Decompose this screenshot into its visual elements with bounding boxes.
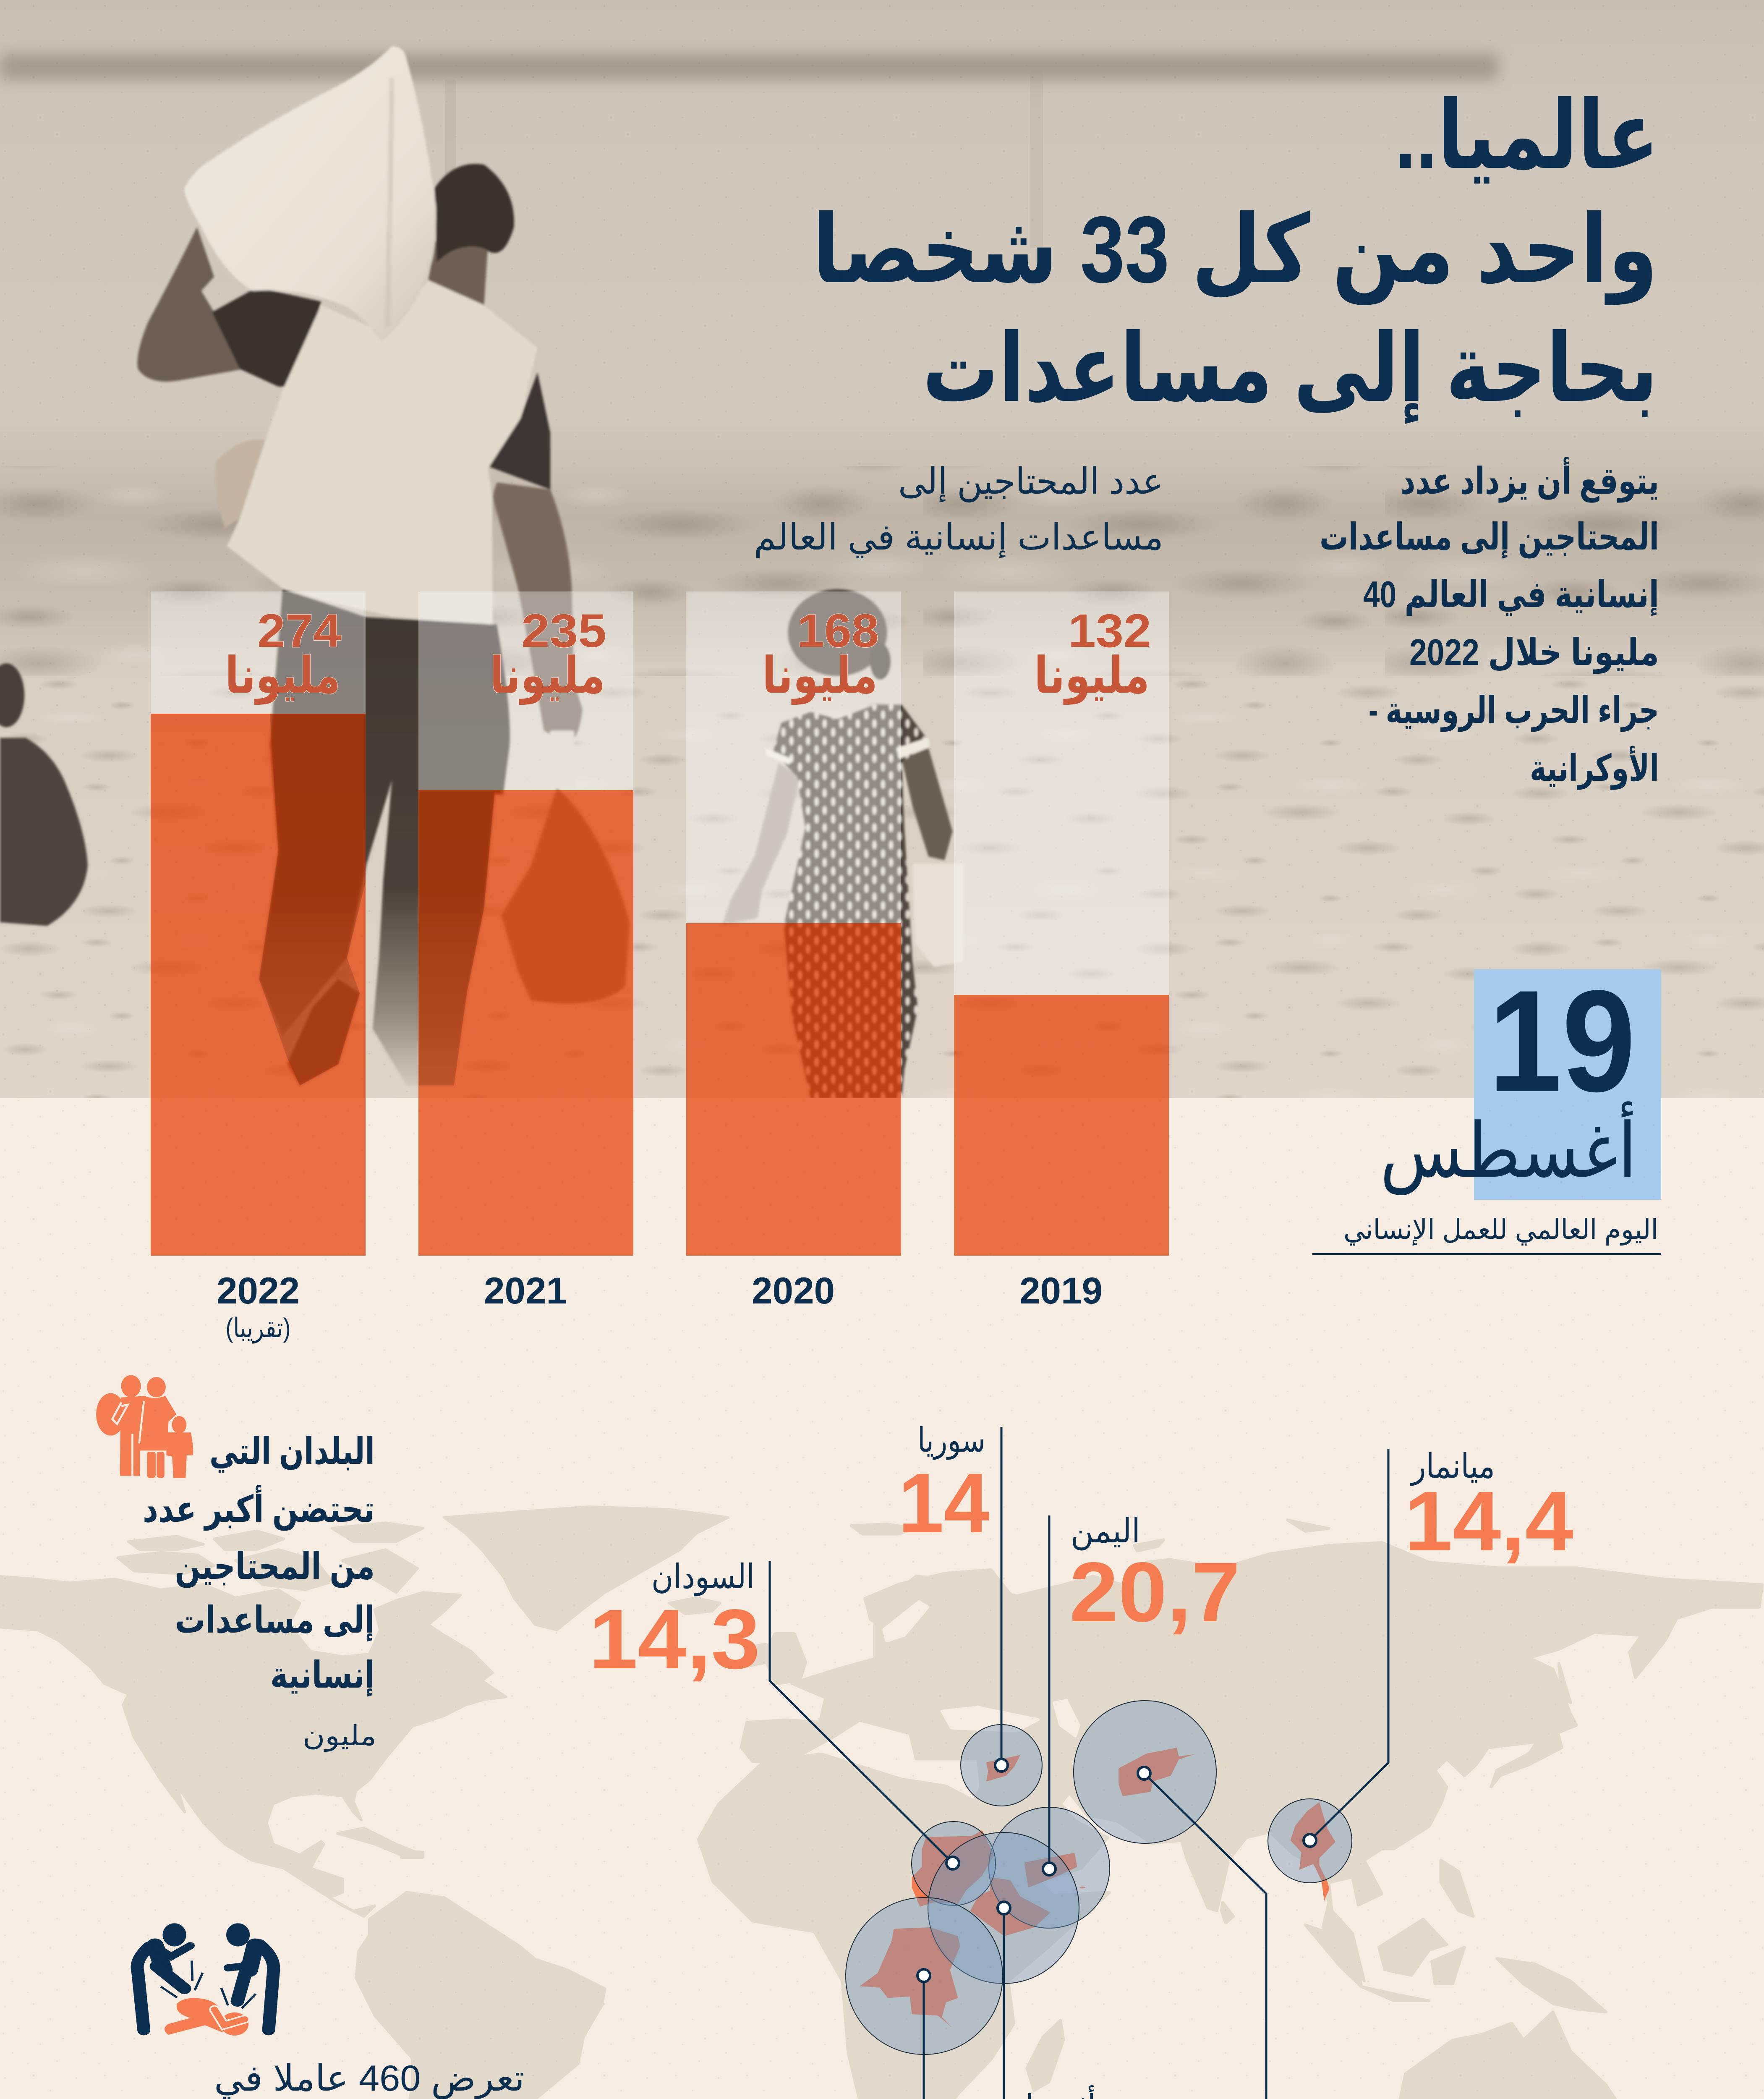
value label 168 million	[762, 605, 879, 705]
country: Sudan	[912, 1830, 994, 1907]
value label 132 million	[1034, 605, 1151, 705]
date badge: 19 August	[1380, 961, 1661, 1200]
map label: Myanmar: ميانمار	[1410, 1447, 1495, 1486]
value label 132 million: مليونا	[1034, 647, 1150, 705]
title: واحد من كل 33 شخصا	[812, 196, 1658, 305]
text block: forecast increase: الأوكرانية	[1530, 746, 1659, 790]
heading: countries hosting most people in need	[143, 1430, 375, 1697]
map label: Yemen: اليمن	[1071, 1512, 1140, 1551]
leg shading through bars	[259, 713, 495, 1086]
bubble circles	[846, 1701, 1352, 2055]
leader lines	[770, 1427, 1388, 2099]
date badge: 19 August: 19	[1488, 961, 1636, 1122]
value label 168 million: 168	[797, 605, 879, 657]
text block: forecast increase: إنسانية في العالم 40	[1363, 573, 1659, 616]
bar 2019	[954, 591, 1169, 1256]
text block: attacks on aid workers: تعرض 460 عاملا في	[214, 2058, 525, 2099]
map label: Sudan: السودان	[651, 1558, 755, 1596]
icon: aid workers attack	[137, 1923, 274, 2036]
title	[812, 82, 1659, 424]
country: Syria	[986, 1755, 1020, 1782]
world humanitarian day caption: اليوم العالمي للعمل الإنساني	[1343, 1214, 1658, 1246]
highlighted countries	[860, 1748, 1335, 2027]
bar 2021	[418, 591, 633, 1256]
chart heading: عدد المحتاجين إلى	[898, 461, 1163, 503]
map label: Yemen: 20,7	[1069, 1544, 1240, 1639]
location dots	[917, 1759, 1316, 1982]
year axis labels: 2021	[484, 1269, 567, 1311]
country: Yemen	[1024, 1853, 1085, 1888]
year axis labels: 2022	[217, 1269, 300, 1311]
paper grain overlay	[0, 1098, 1764, 2099]
text block: forecast increase: جراء الحرب الروسية -	[1369, 689, 1659, 732]
heading: countries hosting most people in need: إلى مساعدات	[175, 1599, 375, 1642]
value label 274 million: مليونا	[225, 647, 340, 705]
value label 235 million: مليونا	[490, 647, 605, 705]
title: عالميا..	[1395, 82, 1659, 188]
value label 168 million: مليونا	[762, 647, 878, 705]
map label: Myanmar: 14,4	[1404, 1473, 1573, 1568]
heading: countries hosting most people in need: البلدان التي	[209, 1430, 375, 1473]
country: Ethiopia	[970, 1877, 1051, 1936]
country: Myanmar	[1291, 1802, 1335, 1901]
value label 274 million: 274	[257, 605, 341, 657]
country: Afghanistan	[1119, 1748, 1195, 1796]
heading: countries hosting most people in need: من المحتاجين	[175, 1545, 375, 1588]
icon: refugee family	[96, 1375, 193, 1478]
bar chart: people in need of humanitarian aid	[151, 591, 1169, 1344]
bar 2022	[151, 591, 366, 1256]
heading: countries hosting most people in need: إنسانية	[270, 1654, 375, 1697]
unit note: million: مليون	[303, 1720, 376, 1752]
year axis labels: 2019	[1019, 1269, 1103, 1311]
text block: forecast increase: مليونا خلال 2022	[1409, 631, 1659, 674]
country: DR Congo	[860, 1927, 960, 2027]
chart heading	[754, 461, 1163, 559]
approximate note: (تقريبا)	[226, 1313, 290, 1344]
value label 235 million: 235	[521, 605, 606, 657]
value label 235 million	[490, 605, 606, 705]
world humanitarian day caption	[1312, 1214, 1661, 1255]
bar 2020	[686, 591, 901, 1256]
value label 132 million: 132	[1068, 605, 1151, 657]
text block: forecast increase: يتوقع أن يزداد عدد	[1401, 457, 1659, 503]
chart heading: مساعدات إنسانية في العالم	[754, 517, 1163, 559]
world map	[0, 1507, 1762, 2099]
text block: forecast increase: المحتاجين إلى مساعدات	[1320, 516, 1659, 559]
map label: Sudan: 14,3	[589, 1591, 760, 1686]
map label: Syria: 14	[898, 1455, 990, 1550]
date badge: 19 August: أغسطس	[1380, 1101, 1637, 1195]
map label: Syria: سوريا	[917, 1421, 985, 1460]
year axis labels	[217, 1269, 1103, 1311]
panel: header photo of aid workers	[0, 0, 1764, 1099]
year axis labels: 2020	[752, 1269, 835, 1311]
text block: forecast increase	[1320, 457, 1659, 790]
heading: countries hosting most people in need: تحتضن أكبر عدد	[143, 1485, 375, 1531]
value label 274 million	[225, 605, 341, 705]
